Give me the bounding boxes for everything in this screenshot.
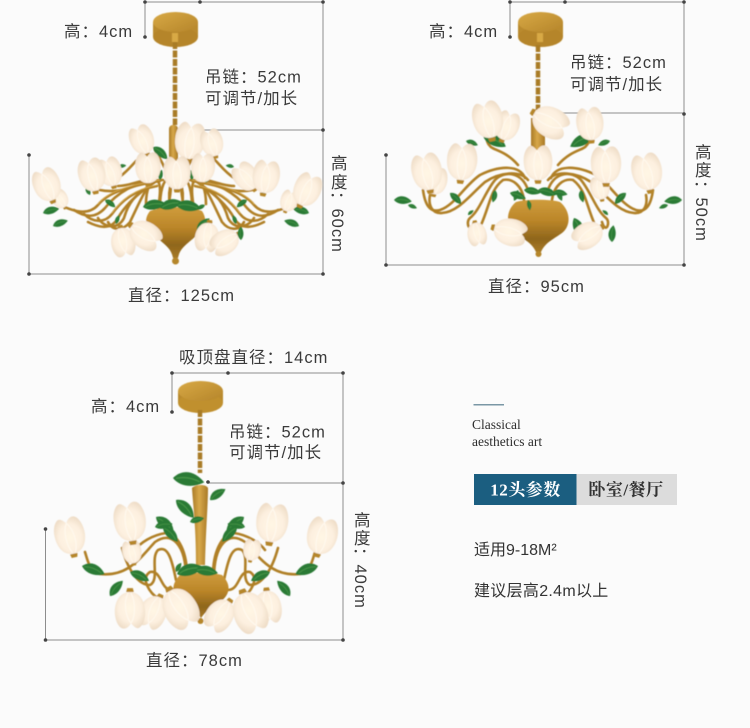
label: diameter 78cm: 直径：78cm — [146, 651, 243, 670]
panel: specification — [472, 404, 677, 600]
label: adjustable: 可调节/加长 — [205, 89, 298, 108]
stem — [192, 485, 208, 565]
badge: 卧室/餐厅: 卧室/餐厅 — [588, 480, 664, 500]
badge: 12头参数 — [474, 474, 576, 505]
label: height 60cm: ：60cm — [328, 191, 346, 253]
chandelier illustration — [29, 12, 326, 264]
label: height 40cm: ：40cm — [351, 547, 369, 609]
label: adjustable: 可调节/加长 — [570, 75, 663, 94]
chain — [173, 42, 177, 125]
panel: chandelier 125cm — [27, 0, 348, 305]
dimension lines — [27, 0, 325, 276]
bowl — [508, 185, 587, 257]
bowl — [173, 560, 229, 624]
label: height 50cm: 高 — [695, 143, 712, 162]
bowl — [142, 196, 212, 264]
label: adjustable: 可调节/加长 — [229, 443, 322, 462]
tagline: Classical — [472, 417, 521, 432]
label: height 40cm: 度 — [354, 529, 372, 548]
chandelier illustration — [51, 381, 342, 637]
tagline — [472, 417, 542, 449]
tagline: aesthetics art — [472, 434, 542, 449]
ceiling canopy — [518, 12, 563, 47]
label: chain length: 吊链：52cm — [229, 422, 326, 442]
label: height 50cm: 度 — [695, 161, 712, 180]
label: height 50cm: ：50cm — [692, 180, 710, 242]
label: diameter 95cm: 直径：95cm — [488, 277, 585, 296]
accent line — [474, 404, 504, 406]
tulip shades — [29, 120, 326, 216]
ceiling canopy — [153, 12, 198, 47]
label: height 50cm — [692, 143, 712, 242]
label: height 40cm — [351, 511, 372, 609]
label: canopy diameter: 吸顶盘直径：14cm — [179, 348, 328, 367]
label: canopy height: 高：4cm — [64, 22, 133, 41]
text: area: 适用9-18M² — [474, 541, 557, 559]
label: chain length: 吊链：52cm — [205, 68, 302, 86]
dimension lines — [44, 371, 345, 642]
arms and leaves — [81, 470, 319, 598]
lower tulips — [108, 213, 246, 260]
label: canopy height: 高：4cm — [91, 397, 160, 416]
label: height 40cm: 高 — [354, 511, 372, 530]
chain — [536, 45, 540, 110]
label: height 60cm — [328, 154, 348, 253]
panel: chandelier 95cm — [384, 0, 712, 296]
text: ceiling height: 建议层高2.4m以上 — [474, 582, 609, 600]
stem — [531, 118, 545, 158]
label: height 60cm: 度 — [331, 173, 348, 192]
arms and leaves — [394, 126, 682, 228]
lower tulips — [115, 579, 283, 637]
tulip shades — [51, 500, 342, 567]
arms and leaves — [42, 143, 310, 229]
tulip shades — [409, 98, 666, 203]
lower tulips — [465, 214, 616, 254]
stem — [169, 125, 178, 165]
label: chain length: 吊链：52cm — [570, 53, 667, 72]
badge: 12头参数: 12头参数 — [490, 480, 561, 500]
label: diameter 125cm: 直径：125cm — [128, 286, 235, 305]
dimension lines — [384, 0, 686, 267]
label: canopy height: 高：4cm — [429, 22, 498, 41]
badge: 卧室/餐厅 — [576, 474, 677, 505]
chandelier illustration — [394, 12, 682, 257]
label: height 60cm: 高 — [331, 154, 348, 173]
ceiling canopy — [178, 381, 223, 413]
chain — [198, 410, 202, 473]
panel: chandelier 78cm — [44, 348, 371, 670]
